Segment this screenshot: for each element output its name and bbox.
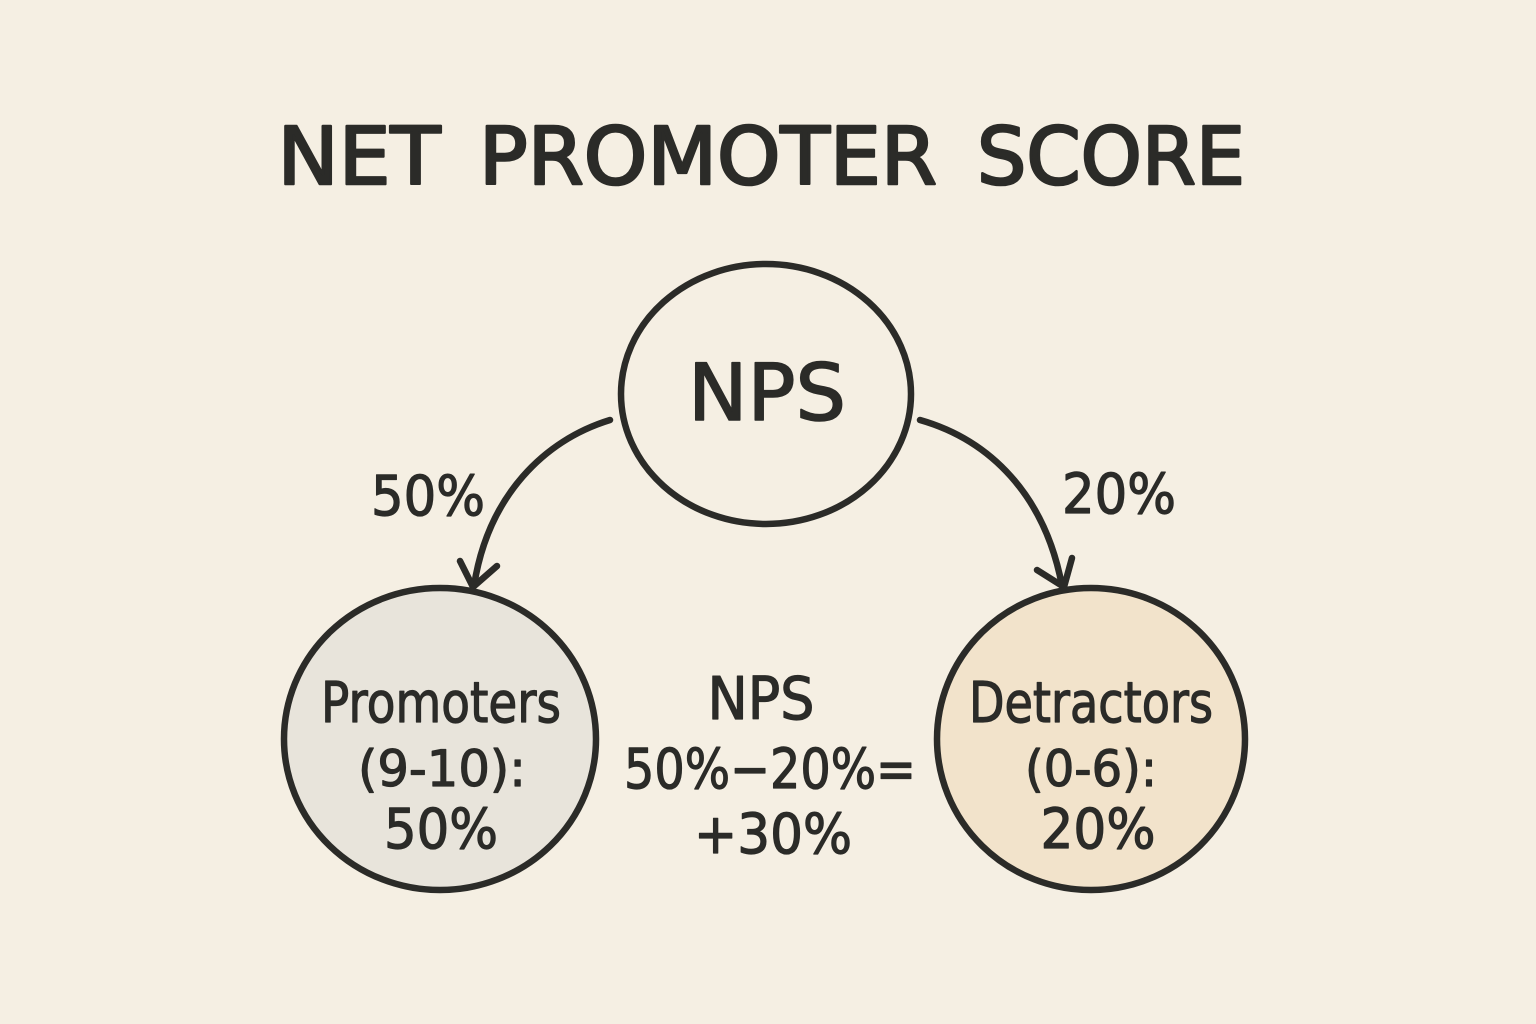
label: promoters share: 50%	[371, 464, 485, 528]
node: NPS circle: NPS	[688, 349, 846, 439]
formula: +30%	[694, 802, 852, 866]
node: detractors circle: (0-6):	[1025, 740, 1157, 798]
node: promoters circle: Promoters	[321, 671, 561, 736]
node: promoters circle	[284, 588, 596, 890]
arrow: NPS to detractors	[920, 420, 1072, 587]
label: detractors share: 20%	[1062, 462, 1176, 526]
title: PROMOTER	[479, 111, 937, 203]
formula: 50%−20%=	[624, 737, 916, 801]
title: SCORE	[977, 111, 1245, 203]
formula	[624, 664, 916, 866]
node: promoters circle: 50%	[384, 797, 498, 861]
node: promoters circle: (9-10):	[358, 740, 526, 798]
title	[278, 111, 1245, 203]
node: NPS circle	[621, 264, 911, 524]
node: detractors circle: 20%	[1040, 797, 1156, 861]
node: detractors circle	[937, 588, 1245, 890]
arrow: NPS to promoters	[460, 420, 610, 587]
title: NET	[278, 111, 441, 203]
node: detractors circle: Detractors	[969, 671, 1213, 736]
formula: NPS	[708, 664, 814, 733]
